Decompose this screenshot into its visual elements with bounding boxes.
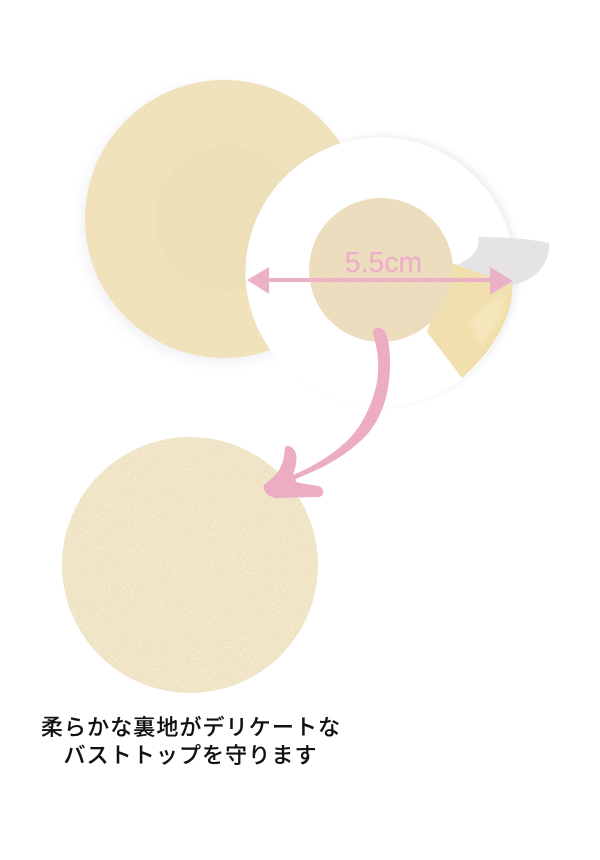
- center fabric circle: [309, 198, 453, 342]
- dimension arrow: [247, 267, 513, 295]
- patch: adhesive backing with peeled liner: [246, 135, 549, 406]
- peeled liner flap: [457, 237, 549, 285]
- caption: バストトップを守ります: [63, 743, 318, 768]
- patch: front fabric side: [82, 80, 363, 362]
- curved pink arrow: [264, 328, 390, 498]
- patch: enlarged soft lining circle: [62, 437, 318, 693]
- dimension label: 5.5cm: [345, 247, 422, 279]
- exposed fabric wedge: [427, 262, 513, 378]
- caption: [41, 715, 341, 768]
- caption: 柔らかな裏地がデリケートな: [41, 715, 341, 740]
